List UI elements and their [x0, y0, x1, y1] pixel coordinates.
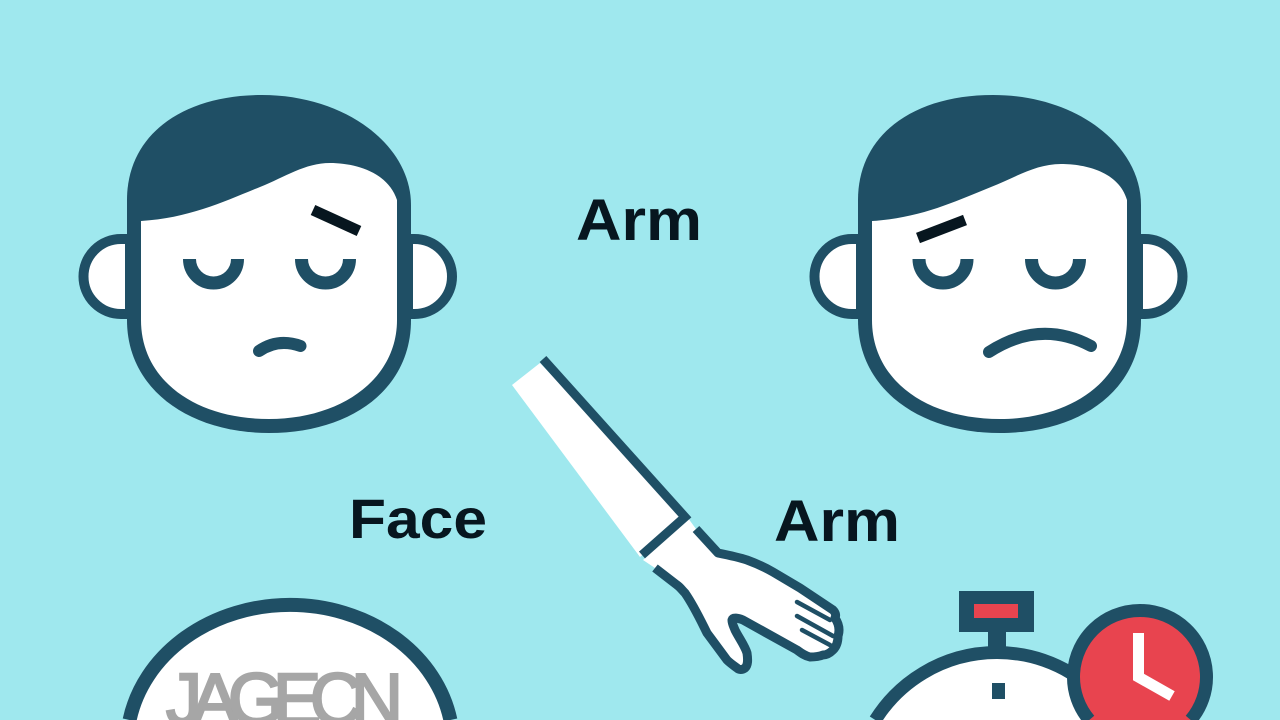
label: lower Arm: Arm — [774, 489, 900, 554]
stopwatch: body border — [875, 653, 1119, 720]
arm: finger lines — [797, 602, 833, 645]
right face: raised eyebrow — [918, 220, 965, 238]
right face: closed eyes — [919, 259, 1080, 283]
icon: stopwatch — [875, 591, 1206, 720]
oval: border arc — [130, 605, 450, 720]
oval: outline — [130, 605, 450, 720]
arm: white sleeve — [512, 363, 687, 557]
right face: large frown — [989, 334, 1091, 352]
icon: bottom-left speech oval — [130, 605, 450, 720]
stopwatch: clock hands — [1138, 633, 1172, 696]
right face: skin — [872, 164, 1127, 419]
right face: head and hair — [858, 95, 1141, 433]
left face: head and hair — [127, 95, 411, 433]
arm: hand outline — [655, 529, 839, 670]
label: Face: Face — [349, 487, 487, 550]
stopwatch: clock border — [1074, 610, 1206, 720]
stopwatch: small tick mark — [992, 683, 1005, 699]
arm: hand fill — [643, 518, 839, 670]
stopwatch: red clock badge — [1074, 610, 1206, 720]
stopwatch: red button inset — [974, 604, 1018, 618]
stopwatch: stem — [988, 630, 1006, 650]
arm: sleeve edge and cuff — [543, 359, 685, 555]
left face: small frown — [259, 343, 300, 351]
icon: arm and hand — [512, 359, 839, 670]
label: top Arm: Arm — [576, 188, 702, 253]
stopwatch: body — [875, 653, 1119, 720]
left face: skin — [141, 163, 397, 419]
left face: raised eyebrow — [313, 210, 359, 231]
icon: left face, mild droop — [84, 95, 452, 433]
icon: right face, deeper frown — [815, 95, 1182, 433]
right face: ears — [815, 239, 1182, 314]
left face: ears — [84, 239, 452, 314]
left face: closed eyes — [190, 259, 350, 283]
stopwatch: top button — [959, 591, 1034, 632]
